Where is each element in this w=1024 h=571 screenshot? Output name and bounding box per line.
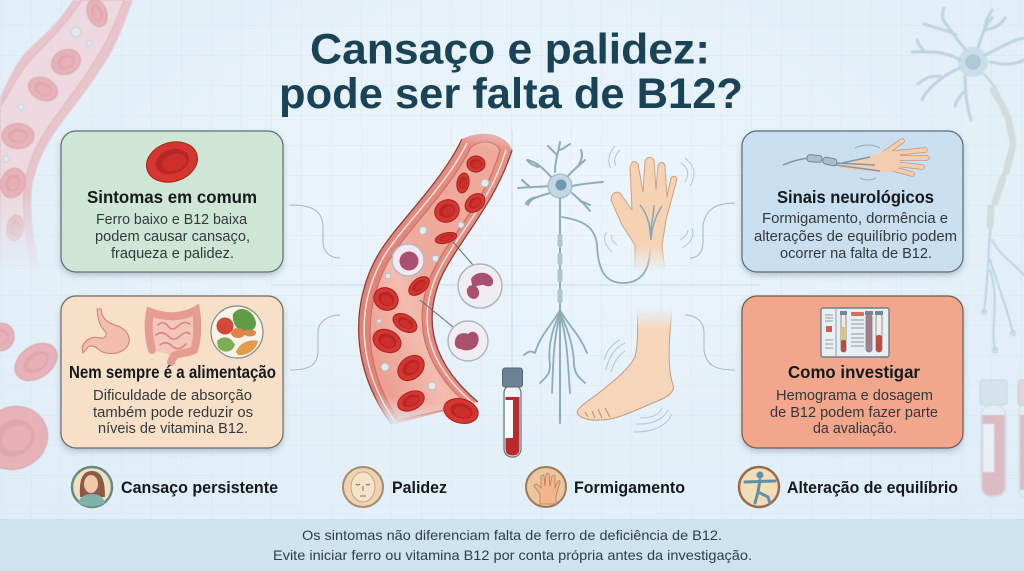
connector lines from panels to central illustration xyxy=(290,203,735,370)
decorative test tubes, bottom right xyxy=(980,380,1024,497)
icon: lab report with tubes xyxy=(821,308,889,357)
white blood cells xyxy=(392,242,502,361)
footer text: Evite iniciar ferro ou vitamina B12 por conta própria antes da investigação. xyxy=(273,547,752,563)
icon: plate of food xyxy=(211,306,263,358)
label: Formigamento xyxy=(574,479,685,497)
text: como investigar: Hemograma e dosagem xyxy=(776,388,933,404)
icon: person balancing xyxy=(739,467,779,507)
plasma particles xyxy=(377,179,489,390)
footer text xyxy=(273,527,752,563)
text: sintomas em comum: podem causar cansaço, xyxy=(95,229,250,245)
symptom: cansaço persistente xyxy=(72,467,278,507)
footer note band xyxy=(0,519,1024,571)
icon: intestine xyxy=(149,310,197,362)
text: sinais neurológicos: ocorrer na falta de B12. xyxy=(780,246,932,262)
icon: stomach xyxy=(82,309,129,354)
heading: nem sempre é a alimentação: Nem sempre é a alimentação xyxy=(69,362,276,382)
icon: arm with nerve xyxy=(783,141,927,180)
text: como investigar: da avaliação. xyxy=(813,421,897,437)
text: nem sempre é a alimentação: Dificuldade de absorção xyxy=(93,388,252,404)
text: sintomas em comum: Ferro baixo e B12 baixa xyxy=(96,212,248,228)
decorative red blood cells, left xyxy=(0,319,64,480)
icon: pale face xyxy=(343,467,383,507)
text: como investigar: de B12 podem fazer parte xyxy=(770,405,938,421)
text: nem sempre é a alimentação xyxy=(93,388,253,437)
red blood cells xyxy=(369,156,489,427)
panel: sintomas em comum xyxy=(61,131,283,272)
symptom: formigamento xyxy=(526,467,685,507)
title: Cansaço e palidez: xyxy=(310,26,710,74)
panel: sinais neurológicos xyxy=(742,131,963,272)
text: sinais neurológicos: alterações de equilíbrio podem xyxy=(754,229,957,245)
icon: hand with tingling xyxy=(604,146,694,272)
text: sintomas em comum: fraqueza e palidez. xyxy=(111,246,234,262)
text: como investigar xyxy=(770,388,938,437)
heading: como investigar: Como investigar xyxy=(788,362,920,382)
text: sinais neurológicos xyxy=(754,211,957,262)
title: pode ser falta de B12? xyxy=(279,70,743,118)
central illustration: blood vessel with cells xyxy=(359,134,512,427)
symptom: alteração de equilíbrio xyxy=(739,467,958,507)
decorative blood vessel, top left xyxy=(0,0,133,280)
icon: tired woman xyxy=(72,467,112,507)
label: Alteração de equilíbrio xyxy=(787,479,958,497)
label: Cansaço persistente xyxy=(121,479,278,497)
text: sinais neurológicos: Formigamento, dormência e xyxy=(762,211,948,227)
heading: sintomas em comum: Sintomas em comum xyxy=(87,187,257,207)
title xyxy=(279,26,743,118)
panel: nem sempre é a alimentação xyxy=(61,296,283,448)
decorative neuron, top right xyxy=(912,8,1024,352)
text: sintomas em comum xyxy=(95,212,250,262)
heading: sinais neurológicos: Sinais neurológicos xyxy=(777,187,934,207)
text: nem sempre é a alimentação: níveis de vitamina B12. xyxy=(98,421,248,437)
icon: tingling hand xyxy=(526,467,566,507)
icon: foot with tingling xyxy=(577,308,673,432)
label: Palidez xyxy=(392,479,447,497)
panel: como investigar xyxy=(742,296,963,448)
text: nem sempre é a alimentação: também pode reduzir os xyxy=(93,405,253,421)
footer text: Os sintomas não diferenciam falta de ferro de deficiência de B12. xyxy=(302,527,722,543)
icon: blood test tube xyxy=(502,368,522,457)
symptom: palidez xyxy=(343,467,447,507)
icon: red blood cell xyxy=(141,135,203,189)
central illustration: neuron xyxy=(518,142,650,423)
